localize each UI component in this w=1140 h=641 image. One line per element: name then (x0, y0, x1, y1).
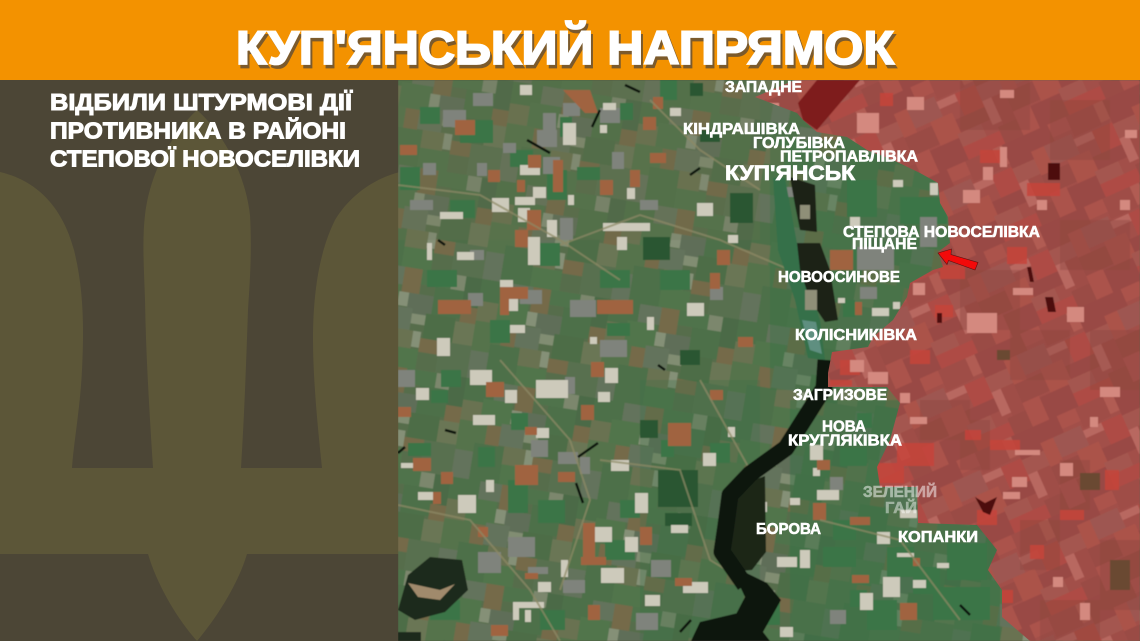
white bare fields (401, 85, 949, 637)
gullies (398, 85, 970, 632)
label: Степова Новоселівка: СТЕПОВА НОВОСЕЛІВКА (843, 224, 1040, 241)
map terrain: farmland fields (398, 80, 1140, 641)
label: Копанки: КОПАНКИ (898, 529, 978, 546)
label: Піщане: ПІЩАНЕ (852, 236, 917, 253)
title: КУП'ЯНСЬКИЙ НАПРЯМОК (236, 21, 894, 74)
label: Голубівка: ГОЛУБІВКА (753, 135, 845, 152)
woodland beside the river (728, 476, 766, 572)
river banks north (773, 178, 825, 360)
orange ploughed fields (398, 90, 920, 636)
dark forest patches along the river (790, 177, 838, 322)
label: Західне: ЗАПАДНЕ (725, 79, 802, 96)
satellite map (398, 80, 1140, 641)
forest bottom left (398, 557, 468, 641)
title: КУП'ЯНСЬКИЙ НАПРЯМОК (238, 24, 896, 78)
river (722, 360, 826, 585)
green fields (400, 80, 990, 630)
text block: summary (50, 89, 360, 172)
label: Гай: ГАЙ (885, 499, 917, 517)
label: Борова: БОРОВА (756, 521, 821, 538)
label: Зелений: ЗЕЛЕНИЙ (863, 483, 937, 501)
occupied zone: red shaded area (750, 80, 1140, 641)
label: Колісниківка: КОЛІСНИКІВКА (795, 327, 917, 344)
text block: summary: ПРОТИВНИКА В РАЙОНІ (50, 116, 346, 144)
map labels (683, 79, 1040, 546)
text block: summary: ВІДБИЛИ ШТУРМОВІ ДІЇ (50, 89, 353, 115)
left panel background (0, 80, 398, 641)
label: Нова: НОВА (822, 418, 866, 436)
grey fields (398, 93, 937, 630)
label: Куп'янськ: КУП'ЯНСЬК (725, 162, 855, 185)
label: Кіндрашівка: КІНДРАШІВКА (683, 121, 800, 138)
label: Загризове: ЗАГРИЗОВЕ (793, 387, 887, 404)
tan tracks and villages (398, 100, 960, 641)
arrow (938, 249, 978, 270)
icon: trident emblem watermark (0, 110, 400, 641)
label: Петропавлівка: ПЕТРОПАВЛІВКА (780, 148, 918, 166)
label: Новоосинове: НОВООСИНОВЕ (778, 269, 900, 286)
header bar (0, 0, 1140, 80)
dark green fields and woods (640, 83, 753, 526)
text block: summary: СТЕПОВОЇ НОВОСЕЛІВКИ (50, 146, 360, 172)
label: Кругляківка: КРУГЛЯКІВКА (788, 432, 902, 450)
